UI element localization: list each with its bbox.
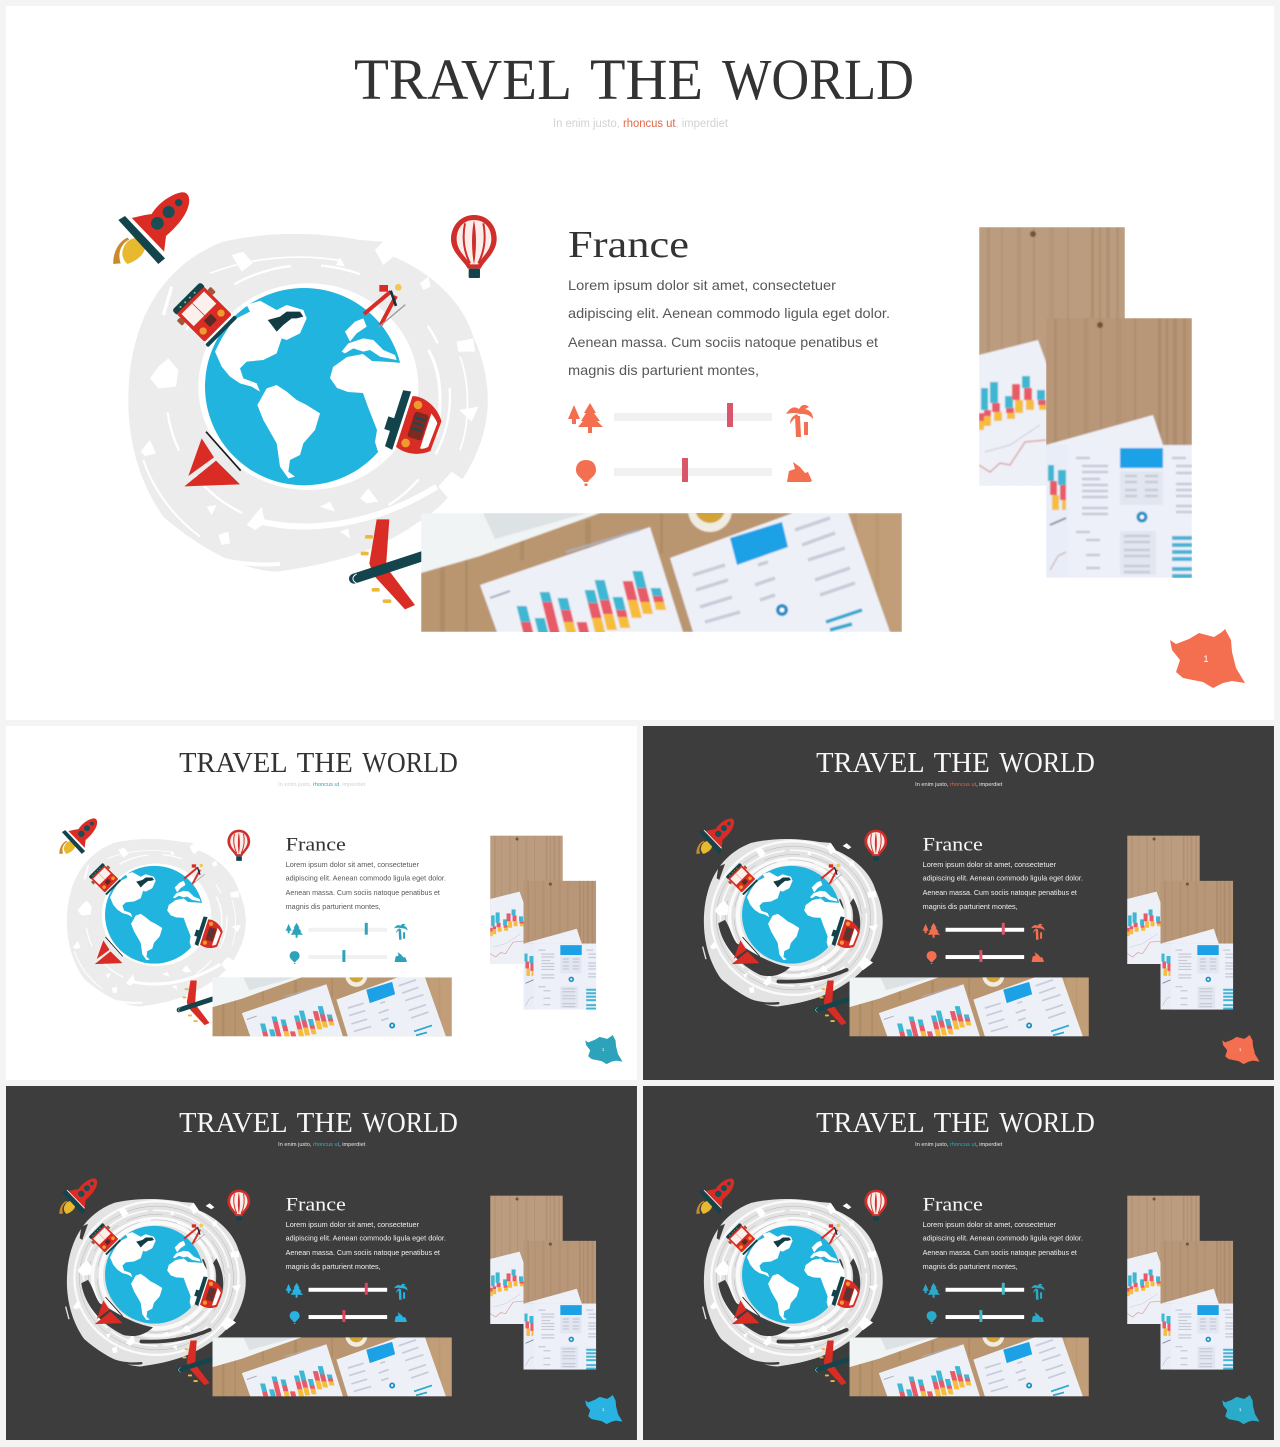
icon: rocket bbox=[59, 1178, 97, 1214]
photo: tall card front bbox=[1161, 1241, 1233, 1370]
title: TRAVEL bbox=[179, 1107, 288, 1139]
icon: trees bbox=[923, 923, 940, 938]
icon: small balloon bbox=[576, 460, 596, 486]
title bbox=[179, 747, 458, 779]
photo: tall card back bbox=[490, 1196, 563, 1324]
icon: trees bbox=[286, 923, 303, 938]
slider 1 bbox=[614, 403, 772, 427]
title: TRAVEL bbox=[816, 747, 925, 779]
ring of brush strokes bbox=[128, 234, 488, 572]
body text: magnis dis parturient montes, bbox=[923, 1264, 1018, 1271]
icon: rocket bbox=[59, 818, 97, 854]
icon: car bbox=[192, 915, 226, 952]
icon: jeep bbox=[724, 1221, 759, 1256]
body text: Aenean massa. Cum sociis natoque penatibus et bbox=[923, 890, 1077, 897]
page badge: 1 bbox=[602, 1047, 605, 1052]
icon: trees bbox=[286, 1283, 303, 1298]
title: THE bbox=[297, 747, 353, 779]
title bbox=[816, 1107, 1095, 1139]
icon: globe bbox=[742, 866, 841, 964]
icon: globe bbox=[742, 1226, 841, 1324]
icon: airplane bbox=[179, 1341, 219, 1385]
icon: palm trees bbox=[394, 1284, 408, 1300]
subtitle: In enim justo, rhoncus ut, imperdiet bbox=[915, 782, 1003, 788]
icon: small balloon bbox=[927, 1311, 937, 1324]
body text: Lorem ipsum dolor sit amet, consectetuer bbox=[923, 1222, 1057, 1229]
icon: hot air balloon bbox=[864, 1190, 887, 1221]
page badge bbox=[585, 1395, 623, 1424]
title: WORLD bbox=[999, 1107, 1095, 1139]
body text: adipiscing elit. Aenean commodo ligula eget dolor. bbox=[923, 1236, 1083, 1243]
icon: sailboat bbox=[732, 937, 760, 964]
page badge: 1 bbox=[1239, 1407, 1242, 1412]
icon: small balloon bbox=[927, 951, 937, 964]
body text: Lorem ipsum dolor sit amet, consectetuer bbox=[923, 862, 1057, 869]
slider 2 bbox=[309, 1310, 387, 1322]
title: THE bbox=[297, 1107, 353, 1139]
photo: tall card back bbox=[1127, 1196, 1200, 1324]
photo: tall card back bbox=[979, 227, 1125, 487]
icon: camel bbox=[1032, 952, 1044, 962]
slider 1 bbox=[309, 1283, 387, 1295]
icon: globe bbox=[205, 288, 403, 485]
ring of brush strokes bbox=[67, 839, 246, 1006]
body text: adipiscing elit. Aenean commodo ligula eget dolor. bbox=[286, 876, 446, 883]
icon: camel bbox=[395, 1312, 407, 1322]
body text: adipiscing elit. Aenean commodo ligula eget dolor. bbox=[923, 876, 1083, 883]
slider 1 bbox=[309, 923, 387, 935]
slider 2 bbox=[946, 950, 1024, 962]
title: TRAVEL bbox=[816, 1107, 925, 1139]
icon: skier bbox=[184, 864, 205, 885]
slide background bbox=[6, 1086, 637, 1440]
body text: Aenean massa. Cum sociis natoque penatibus et bbox=[568, 334, 878, 350]
title: WORLD bbox=[362, 1107, 458, 1139]
ring of brush strokes bbox=[703, 839, 883, 1006]
icon: trees bbox=[568, 403, 603, 433]
photo: tall card front bbox=[1161, 881, 1233, 1010]
body text: Aenean massa. Cum sociis natoque penatibus et bbox=[286, 890, 440, 897]
heading: France: France bbox=[286, 1194, 346, 1215]
title: THE bbox=[590, 47, 703, 112]
body text: magnis dis parturient montes, bbox=[286, 904, 381, 911]
title: WORLD bbox=[999, 747, 1095, 779]
icon: skier bbox=[821, 864, 842, 885]
title: WORLD bbox=[722, 47, 914, 112]
slider 1 bbox=[946, 1283, 1024, 1295]
icon: palm trees bbox=[394, 924, 408, 940]
icon: small balloon bbox=[290, 1311, 300, 1324]
title bbox=[179, 1107, 458, 1139]
icon: palm trees bbox=[1031, 1284, 1045, 1300]
icon: car bbox=[192, 1275, 226, 1312]
body text: Lorem ipsum dolor sit amet, consectetuer bbox=[286, 862, 420, 869]
icon: airplane bbox=[816, 981, 856, 1025]
icon: skier bbox=[821, 1224, 842, 1245]
page badge: 1 bbox=[602, 1407, 605, 1412]
icon: sailboat bbox=[95, 937, 123, 964]
icon: jeep bbox=[169, 279, 240, 350]
slide background bbox=[6, 726, 637, 1080]
page badge bbox=[1222, 1035, 1260, 1064]
panel: small dark teal slide bbox=[643, 1086, 1274, 1440]
icon: jeep bbox=[87, 861, 122, 896]
icon: palm trees bbox=[1031, 924, 1045, 940]
icon: trees bbox=[923, 1283, 940, 1298]
continent: Africa bbox=[167, 1259, 208, 1307]
page badge bbox=[585, 1035, 623, 1064]
icon: globe bbox=[105, 1226, 204, 1324]
slider 2 bbox=[946, 1310, 1024, 1322]
title: THE bbox=[934, 747, 990, 779]
subtitle: In enim justo, rhoncus ut, imperdiet bbox=[915, 1142, 1003, 1148]
slide background bbox=[643, 726, 1274, 1080]
body text bbox=[286, 1222, 446, 1271]
slider 2 bbox=[309, 950, 387, 962]
icon: car bbox=[379, 387, 447, 462]
heading: France: France bbox=[923, 1194, 983, 1215]
subtitle: In enim justo, rhoncus ut, imperdiet bbox=[278, 1142, 366, 1148]
icon: camel bbox=[1032, 1312, 1044, 1322]
title: TRAVEL bbox=[179, 747, 288, 779]
panel: small dark coral slide bbox=[643, 726, 1274, 1080]
icon: hot air balloon bbox=[451, 215, 497, 278]
page badge bbox=[1170, 629, 1245, 688]
photo strip: reports on desk bbox=[421, 488, 902, 636]
title: WORLD bbox=[362, 747, 458, 779]
icon: jeep bbox=[724, 861, 759, 896]
icon: airplane bbox=[353, 519, 433, 609]
photo: tall card back bbox=[1127, 836, 1200, 964]
photo: tall card front bbox=[524, 881, 596, 1010]
panel: main white slide bbox=[6, 6, 1274, 720]
icon: airplane bbox=[816, 1341, 856, 1385]
icon: sailboat bbox=[184, 432, 241, 486]
body text bbox=[286, 862, 446, 911]
page badge: 1 bbox=[1203, 654, 1209, 664]
subtitle: In enim justo, rhoncus ut, imperdiet bbox=[553, 118, 729, 130]
body text: Aenean massa. Cum sociis natoque penatibus et bbox=[923, 1250, 1077, 1257]
title: TRAVEL bbox=[354, 47, 572, 112]
icon: airplane bbox=[179, 981, 219, 1025]
icon: car bbox=[829, 915, 863, 952]
body text bbox=[923, 1222, 1083, 1271]
ring of brush strokes bbox=[66, 1199, 246, 1366]
heading: France: France bbox=[286, 834, 346, 855]
icon: car bbox=[829, 1275, 863, 1312]
photo strip: reports on desk bbox=[850, 1325, 1089, 1398]
title bbox=[816, 747, 1095, 779]
heading: France: France bbox=[568, 224, 689, 266]
panel: small white teal slide bbox=[6, 726, 637, 1080]
body text: magnis dis parturient montes, bbox=[923, 904, 1018, 911]
icon: sailboat bbox=[95, 1297, 123, 1324]
icon: rocket bbox=[696, 1178, 734, 1214]
body text: magnis dis parturient montes, bbox=[286, 1264, 381, 1271]
icon: globe bbox=[105, 866, 204, 964]
title bbox=[354, 47, 914, 112]
icon: camel bbox=[395, 952, 407, 962]
slide background bbox=[643, 1086, 1274, 1440]
title: THE bbox=[934, 1107, 990, 1139]
body text: adipiscing elit. Aenean commodo ligula eget dolor. bbox=[286, 1236, 446, 1243]
icon: hot air balloon bbox=[227, 830, 250, 861]
ring of brush strokes bbox=[703, 1199, 883, 1366]
slide background bbox=[6, 6, 1274, 720]
icon: hot air balloon bbox=[227, 1190, 250, 1221]
page badge: 1 bbox=[1239, 1047, 1242, 1052]
body text bbox=[923, 862, 1083, 911]
body text: adipiscing elit. Aenean commodo ligula eget dolor. bbox=[568, 305, 890, 321]
continent: Africa bbox=[804, 1259, 845, 1307]
icon: hot air balloon bbox=[864, 830, 887, 861]
body text: Aenean massa. Cum sociis natoque penatibus et bbox=[286, 1250, 440, 1257]
heading: France: France bbox=[923, 834, 983, 855]
panel: small dark blue slide bbox=[6, 1086, 637, 1440]
slider 2 bbox=[614, 458, 772, 482]
slider 1 bbox=[946, 923, 1024, 935]
body text: magnis dis parturient montes, bbox=[568, 362, 759, 378]
icon: skier bbox=[184, 1224, 205, 1245]
body text bbox=[568, 277, 890, 378]
photo strip: reports on desk bbox=[213, 1325, 452, 1398]
body text: Lorem ipsum dolor sit amet, consectetuer bbox=[568, 277, 836, 293]
photo: tall card back bbox=[490, 836, 563, 964]
icon: small balloon bbox=[290, 951, 300, 964]
subtitle: In enim justo, rhoncus ut, imperdiet bbox=[278, 782, 366, 788]
icon: rocket bbox=[696, 818, 734, 854]
continent: Africa bbox=[330, 354, 412, 452]
icon: rocket bbox=[113, 192, 189, 264]
photo: tall card front bbox=[1046, 318, 1192, 578]
continent: Africa bbox=[804, 899, 845, 947]
icon: skier bbox=[364, 284, 405, 327]
icon: palm trees bbox=[786, 405, 813, 437]
photo: tall card front bbox=[524, 1241, 596, 1370]
continent: Africa bbox=[167, 899, 208, 947]
photo strip: reports on desk bbox=[213, 965, 452, 1038]
body text: Lorem ipsum dolor sit amet, consectetuer bbox=[286, 1222, 420, 1229]
icon: camel bbox=[787, 462, 812, 482]
photo strip: reports on desk bbox=[850, 965, 1089, 1038]
icon: sailboat bbox=[732, 1297, 760, 1324]
icon: jeep bbox=[87, 1221, 122, 1256]
page badge bbox=[1222, 1395, 1260, 1424]
